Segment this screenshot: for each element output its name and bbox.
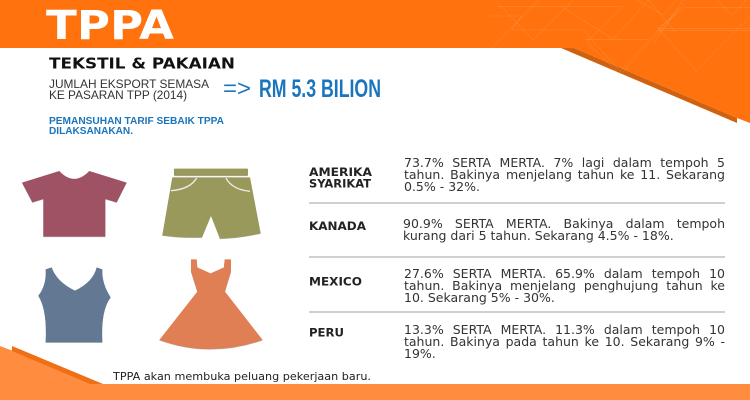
table dividers <box>309 203 725 312</box>
country labels: MEXICO <box>309 274 362 288</box>
title: TPPA <box>46 3 174 49</box>
icon: shorts <box>162 169 261 239</box>
country labels: SYARIKAT <box>309 176 371 190</box>
text: Peru: 13.3% SERTA MERTA. 11.3% dalam tempoh 10 <box>404 322 725 337</box>
country labels <box>309 165 372 340</box>
export description: KE PASARAN TPP (2014) <box>49 88 187 102</box>
country labels: PERU <box>309 326 344 340</box>
text: Mexico: 27.6% SERTA MERTA. 65.9% dalam tempoh 10 <box>404 266 725 280</box>
tariff note: PEMANSUHAN TARIF SEBAIK TPPA <box>49 115 224 127</box>
text: Mexico: tahun. Bakinya menjelang penghujung tahun ke <box>404 278 725 292</box>
tariff note: DILAKSANAKAN. <box>49 125 133 137</box>
text: Mexico: 10. Sekarang 5% - 30%. <box>404 290 555 304</box>
text: Amerika Syarikat: tahun. Bakinya menjelang tahun ke 11. Sekarang <box>404 167 725 182</box>
subtitle: TEKSTIL & PAKAIAN <box>49 54 235 72</box>
export description <box>49 77 209 102</box>
bottom band <box>0 346 750 400</box>
text: Mexico <box>404 266 725 304</box>
text: Peru <box>404 322 725 361</box>
text: Peru: tahun. Bakinya pada tahun ke 10. Sekarang 9% - <box>404 334 725 349</box>
tariff note <box>49 115 224 137</box>
text: Amerika Syarikat <box>404 155 725 194</box>
export value: RM 5.3 BILION <box>259 75 381 103</box>
icon: t-shirt <box>22 171 127 237</box>
text: Amerika Syarikat: 0.5% - 32%. <box>404 179 480 194</box>
arrow: => <box>223 75 251 101</box>
text: Kanada: kurang dari 5 tahun. Sekarang 4.5% - 18%. <box>403 228 674 243</box>
country labels: KANADA <box>309 219 366 233</box>
text: Kanada <box>403 216 725 243</box>
country labels: AMERIKA <box>309 165 372 179</box>
text: Amerika Syarikat: 73.7% SERTA MERTA. 7% lagi dalam tempoh 5 <box>404 155 725 170</box>
icon: dress <box>159 259 263 349</box>
text: Peru: 19%. <box>404 346 436 361</box>
export description: JUMLAH EKSPORT SEMASA <box>49 77 209 91</box>
header banner <box>0 0 750 123</box>
icon: tank top <box>38 267 111 342</box>
text: Kanada: 90.9% SERTA MERTA. Bakinya dalam tempoh <box>403 216 725 231</box>
footer note: TPPA akan membuka peluang pekerjaan baru. <box>112 370 371 383</box>
